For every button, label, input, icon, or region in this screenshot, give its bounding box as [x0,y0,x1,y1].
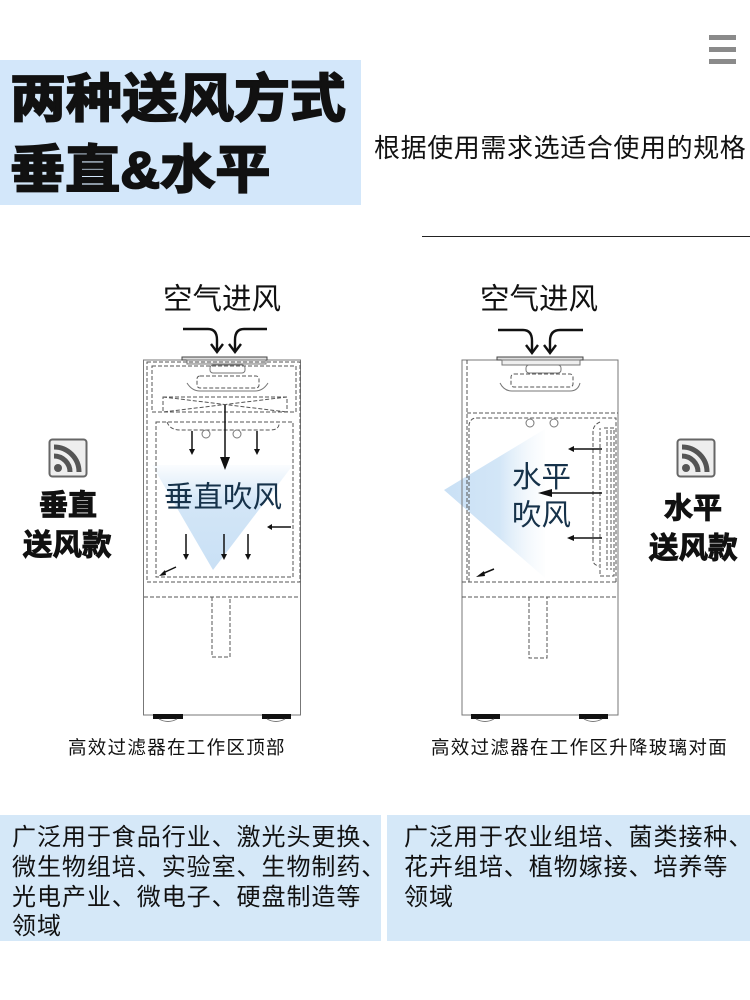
icon: intake arrows [498,330,583,353]
title panel [0,60,361,205]
panel: horizontal applications [387,815,750,941]
airflow label: 水平 [512,461,571,494]
panel: horizontal applications: 广泛用于农业组培、菌类接种、 [404,824,750,851]
callout: horizontal type: 水平 [664,492,722,525]
panel: horizontal applications: 花卉组培、植物嫁接、培养等 [404,854,728,881]
caption: vertical: 高效过滤器在工作区顶部 [68,737,286,758]
diagram: cabinet outline [462,357,618,722]
icon: signal [50,440,86,476]
icon: intake arrows [183,329,267,352]
panel: horizontal applications: 领域 [404,884,454,911]
airflow label: 吹风 [512,499,571,532]
title [10,71,346,200]
title: 两种送风方式 [10,71,346,129]
air intake label: 空气进风 [480,283,598,316]
callout: vertical type: 垂直 [39,489,97,522]
air intake label: 空气进风 [163,283,281,316]
icon: signal [678,440,714,476]
diagram: triangle airflow [444,429,545,578]
panel: vertical applications: 光电产业、微电子、硬盘制造等 [12,884,361,911]
subtitle: 根据使用需求选适合使用的规格 [374,133,746,163]
icon: menu [709,35,736,64]
diagram: triangle airflow [152,465,293,570]
callout: horizontal type: 送风款 [649,532,738,565]
airflow label [512,461,571,532]
callout: vertical type [23,440,112,562]
callout: vertical type: 送风款 [23,529,112,562]
airflow label: 垂直吹风 [164,481,282,514]
diagram: airflow arrows [159,405,291,576]
panel: vertical applications: 微生物组培、实验室、生物制药、 [12,854,386,881]
diagram: cabinet outline [144,357,300,722]
panel: vertical cabinet [144,283,300,722]
title: 垂直&水平 [10,141,270,200]
panel: vertical applications: 领域 [12,913,62,940]
diagram: airflow arrows [476,446,602,577]
panel: horizontal cabinet [444,283,618,722]
panel: vertical applications [0,815,386,941]
callout: horizontal type [649,440,738,565]
caption: horizontal: 高效过滤器在工作区升降玻璃对面 [431,737,728,758]
panel: vertical applications: 广泛用于食品行业、激光头更换、 [12,824,386,851]
